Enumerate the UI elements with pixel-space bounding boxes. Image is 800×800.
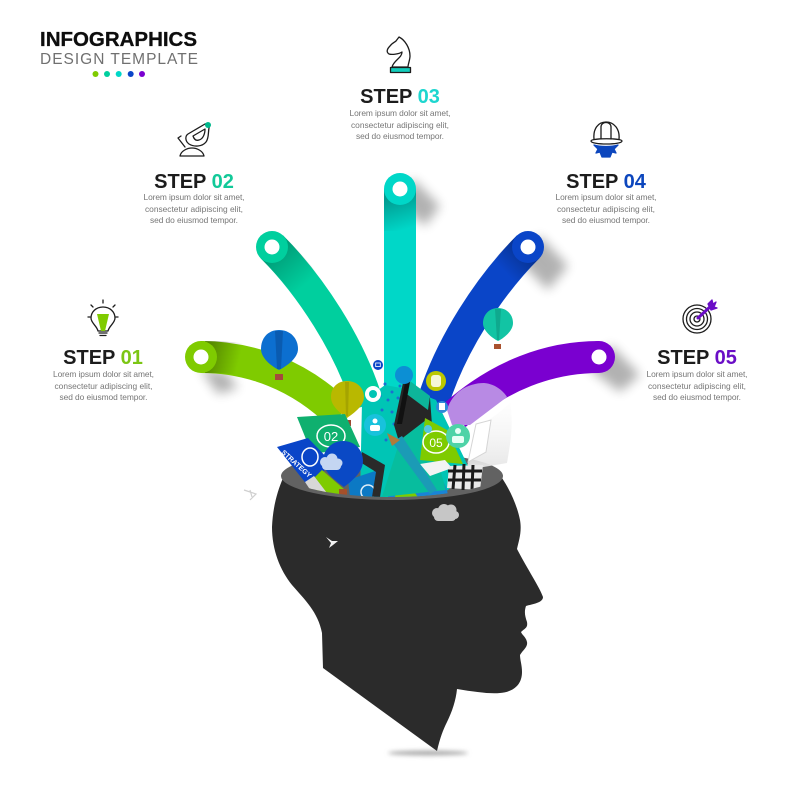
icon: chess knight: [387, 37, 410, 72]
balloon: blue lower: [323, 441, 363, 495]
heading: STEP 03: [360, 86, 440, 108]
icon: target and dart: [683, 300, 717, 333]
black block: [360, 452, 385, 497]
icon: pale badge: [424, 425, 432, 433]
teal backdrop: [360, 385, 470, 497]
teal book: [382, 420, 446, 497]
arm: step 2: [256, 231, 368, 405]
icon: database badge: [426, 371, 446, 391]
arrow shadows: [200, 178, 640, 394]
icon: small monitor badge: [373, 360, 383, 370]
balloon: olive: [331, 381, 364, 426]
title: infographics: INFOGRAPHICS: [40, 28, 197, 51]
pale cloud: [320, 454, 342, 470]
body text: Lorem ipsum dolor sit amet,: [646, 369, 748, 379]
head shape: [272, 478, 543, 751]
balloon: blue: [261, 330, 298, 380]
body text: consectetur adipiscing elit,: [648, 381, 746, 391]
body text: [144, 192, 244, 225]
blue book strategy: [277, 438, 325, 484]
step 2: [144, 122, 244, 225]
dark tablet: [394, 384, 432, 438]
body text: consectetur adipiscing elit,: [557, 204, 655, 214]
body text: consectetur adipiscing elit,: [145, 204, 243, 214]
open skull rim: [281, 452, 503, 500]
head silhouette: [272, 452, 543, 756]
body text: sed do eiusmod tempor.: [150, 215, 238, 225]
green book 02: 02: [324, 429, 338, 444]
subtitle: design template: DESIGN TEMPLATE: [40, 51, 198, 68]
blue dot spray: [378, 382, 402, 442]
icon: helmet and gear: [591, 122, 622, 157]
icon: gear badge: [365, 386, 381, 402]
arm: step 4: [432, 231, 544, 405]
body text: [556, 192, 656, 225]
step 4: [556, 122, 656, 225]
step 3: [350, 37, 450, 141]
fountain pen: [387, 433, 437, 494]
title block: [40, 28, 198, 77]
arm: step 3: [384, 173, 416, 414]
icon: group badge: [395, 366, 413, 384]
body text: [53, 369, 154, 402]
body text: [646, 369, 748, 402]
heading: STEP 04: [566, 171, 647, 193]
body text: Lorem ipsum dolor sit amet,: [144, 192, 244, 202]
blue book strategy: STRATEGY: [280, 449, 313, 480]
green book 05: [420, 418, 463, 464]
icon: mint person badge: [446, 424, 470, 448]
colour dots: [92, 71, 145, 77]
body text: sed do eiusmod tempor.: [60, 392, 148, 402]
heading: STEP 01: [63, 347, 143, 369]
light bulb: purple glow and glass: [447, 383, 512, 470]
checkered block: [447, 465, 483, 490]
icon: person badge: [364, 414, 386, 436]
arm: step 1: [185, 341, 340, 415]
body text: Lorem ipsum dolor sit amet,: [53, 369, 154, 379]
exploding contents of the head: [277, 366, 511, 497]
cloud on head: [432, 504, 459, 521]
body text: sed do eiusmod tempor.: [356, 131, 444, 141]
paper plane: [244, 490, 256, 500]
body text: sed do eiusmod tempor.: [653, 392, 741, 402]
body text: consectetur adipiscing elit,: [54, 381, 152, 391]
arm: step 5: [455, 341, 615, 415]
green book 05: 05: [429, 436, 443, 450]
body text: [350, 108, 450, 141]
heading: STEP 05: [657, 347, 737, 369]
body text: Lorem ipsum dolor sit amet,: [350, 108, 450, 118]
floor shadow: [388, 750, 468, 756]
body text: sed do eiusmod tempor.: [562, 215, 650, 225]
step 1: [53, 300, 154, 402]
icon: small blue badge: [436, 401, 448, 413]
green and grey slips: [314, 470, 344, 494]
body text: consectetur adipiscing elit,: [351, 120, 449, 130]
icon: microscope: [178, 122, 211, 156]
body text: Lorem ipsum dolor sit amet,: [556, 192, 656, 202]
step 5: [646, 300, 748, 402]
earth globe: [388, 483, 448, 497]
green book 02: [297, 414, 360, 454]
icon: light bulb: [88, 300, 118, 336]
white paper slip: [420, 460, 452, 476]
bird on head: [326, 537, 338, 548]
heading: STEP 02: [154, 171, 234, 193]
blue book lower: [348, 470, 378, 497]
balloon: teal: [483, 308, 513, 349]
